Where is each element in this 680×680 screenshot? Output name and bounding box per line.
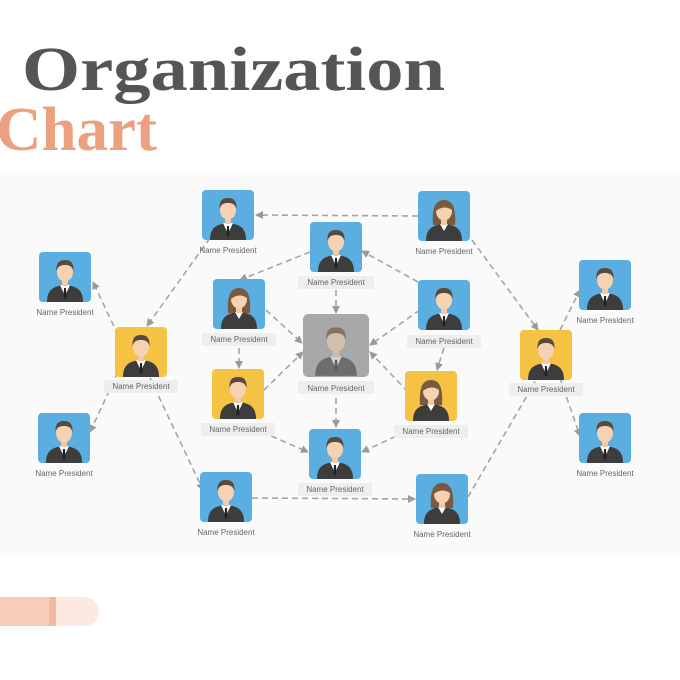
node: center <box>298 314 374 394</box>
node: left orange <box>104 327 178 393</box>
node: center: Name President <box>307 384 365 393</box>
node: inner left: Name President <box>210 335 268 344</box>
node: left outer top <box>36 252 94 317</box>
node: top-right <box>415 191 473 256</box>
node: bottom center: Name President <box>306 485 364 494</box>
node: top center <box>298 222 374 289</box>
node: bottom left: Name President <box>197 528 255 537</box>
node: bottom right: Name President <box>413 530 471 539</box>
node: top center: Name President <box>307 278 365 287</box>
node: right outer top: Name President <box>576 316 634 325</box>
connectors <box>90 215 580 499</box>
title: Chart <box>0 96 157 164</box>
background panel <box>0 172 680 554</box>
node: right orange: Name President <box>517 385 575 394</box>
node: inner right orange <box>394 371 468 438</box>
node: right outer bottom: Name President <box>576 469 634 478</box>
node: inner right orange: Name President <box>402 427 460 436</box>
node: bottom left <box>197 472 255 537</box>
node: right orange <box>509 330 583 396</box>
node: inner left <box>202 279 276 346</box>
node: inner right: Name President <box>415 337 473 346</box>
node: bottom right <box>413 474 471 539</box>
progress bar <box>0 597 99 626</box>
node: right outer bottom <box>576 413 634 478</box>
node: left outer bottom <box>35 413 93 478</box>
node: left outer bottom: Name President <box>35 469 93 478</box>
node: inner left orange: Name President <box>209 425 267 434</box>
node: top-left <box>199 190 257 255</box>
node: right outer top <box>576 260 634 325</box>
node: top-right: Name President <box>415 247 473 256</box>
node: bottom center <box>298 429 372 496</box>
node: inner right <box>407 280 481 348</box>
title: Organization <box>22 36 445 104</box>
node: inner left orange <box>201 369 275 436</box>
node: top-left: Name President <box>199 246 257 255</box>
node: left outer top: Name President <box>36 308 94 317</box>
node: left orange: Name President <box>112 382 170 391</box>
title <box>0 36 445 164</box>
